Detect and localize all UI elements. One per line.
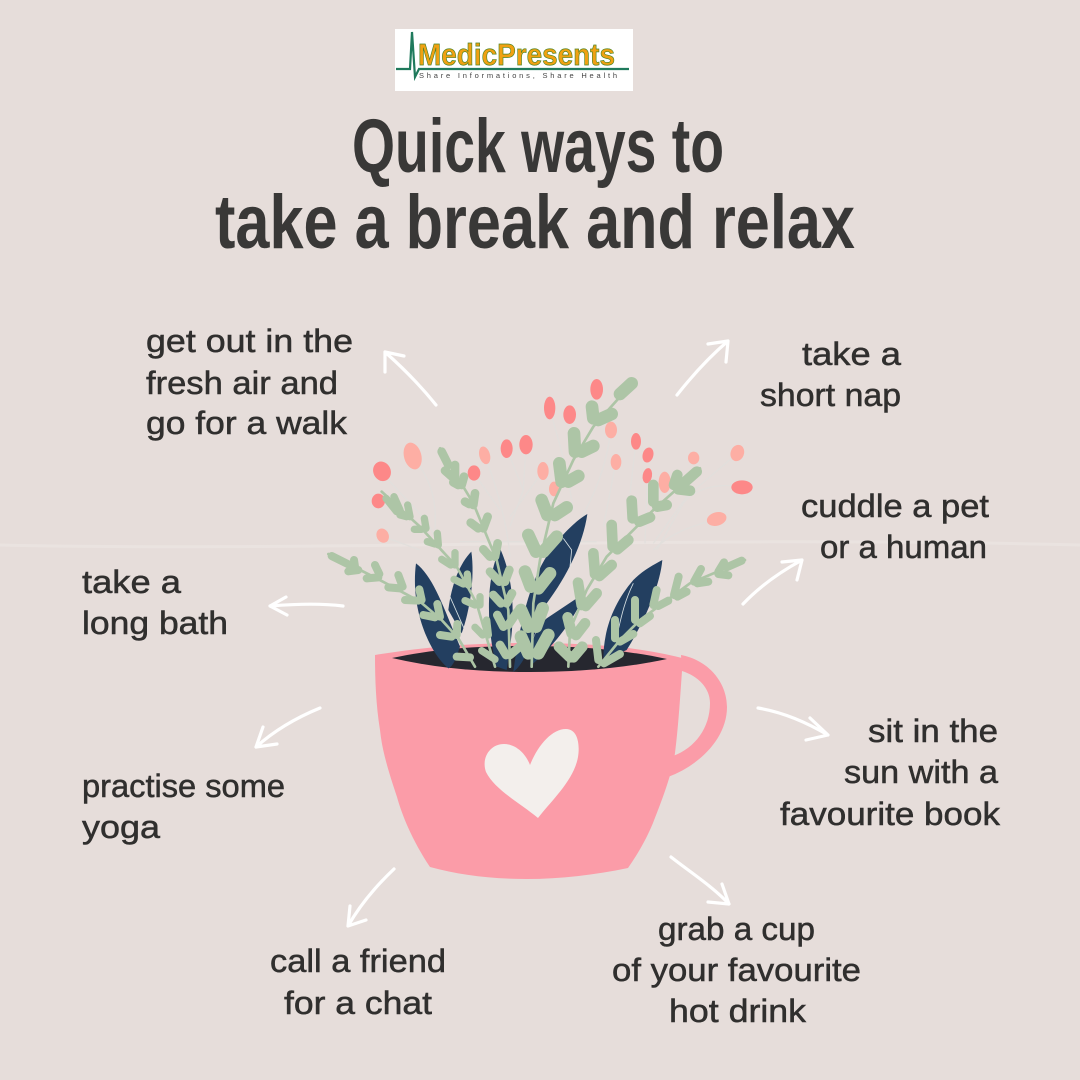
label: cuddle: or a human: [820, 529, 987, 565]
sprig leaves: far left: [332, 556, 470, 657]
arrow: cuddle: [743, 560, 802, 604]
label: cuddle: cuddle a pet: [801, 488, 989, 524]
label: walk: go for a walk: [146, 405, 348, 441]
label: sun: sun with a: [844, 754, 998, 790]
sprig stems: [328, 380, 745, 667]
label: hot drink: of your favourite: [612, 952, 861, 988]
labels: [82, 323, 1001, 1029]
label: hot drink: grab a cup: [658, 911, 815, 947]
sprig leaves: inner left: [442, 452, 519, 655]
arrow: friend: [348, 869, 394, 926]
arrow: sun: [758, 708, 828, 740]
label: cuddle: [801, 488, 989, 565]
title: Quick ways to: [352, 104, 724, 189]
label: bath: long bath: [82, 605, 228, 641]
plant: [328, 379, 753, 672]
arrows: [256, 341, 828, 926]
logo: [395, 29, 633, 91]
label: sun: favourite book: [780, 796, 1001, 832]
label: sun: sit in the: [868, 713, 998, 749]
label: nap: [760, 336, 901, 413]
navy leaves: [415, 514, 662, 672]
logo: Share Informations, Share Health: [419, 71, 617, 80]
label: bath: [82, 564, 228, 641]
arrow: walk: [385, 352, 436, 405]
cup body: [375, 643, 682, 879]
label: nap: take a: [802, 336, 901, 372]
label: walk: [146, 323, 353, 441]
arrow: hot drink: [671, 857, 729, 904]
arrow: nap: [677, 341, 728, 395]
logo: MedicPresents: [418, 37, 615, 72]
label: friend: [270, 943, 446, 1021]
sprig leaves: right: [559, 472, 697, 657]
label: yoga: yoga: [82, 809, 160, 845]
sprig leaves: top: [521, 383, 632, 653]
leaf veins: [450, 538, 633, 637]
heart: [485, 729, 579, 818]
arrow: bath: [270, 597, 343, 615]
label: friend: for a chat: [284, 985, 432, 1021]
label: friend: call a friend: [270, 943, 446, 979]
label: sun: [780, 713, 1001, 832]
sage sprigs: [328, 380, 745, 667]
cup opening: [392, 646, 667, 672]
label: walk: get out in the: [146, 323, 353, 359]
cup handle: [668, 655, 727, 777]
label: nap: short nap: [760, 377, 901, 413]
label: hot drink: [612, 911, 861, 1029]
berries: [370, 379, 753, 508]
label: bath: take a: [82, 564, 181, 600]
label: walk: fresh air and: [146, 365, 338, 401]
illustration: plant in a pink cup: [328, 379, 753, 879]
berry stems: [378, 409, 742, 557]
sprig leaves: far right: [596, 561, 742, 663]
label: hot drink: hot drink: [669, 993, 807, 1029]
label: yoga: [82, 768, 285, 845]
title: take a break and relax: [215, 180, 855, 265]
label: yoga: practise some: [82, 768, 285, 804]
title: [215, 104, 855, 265]
arrow: yoga: [256, 708, 320, 747]
sprig leaves: mid left: [386, 497, 495, 659]
